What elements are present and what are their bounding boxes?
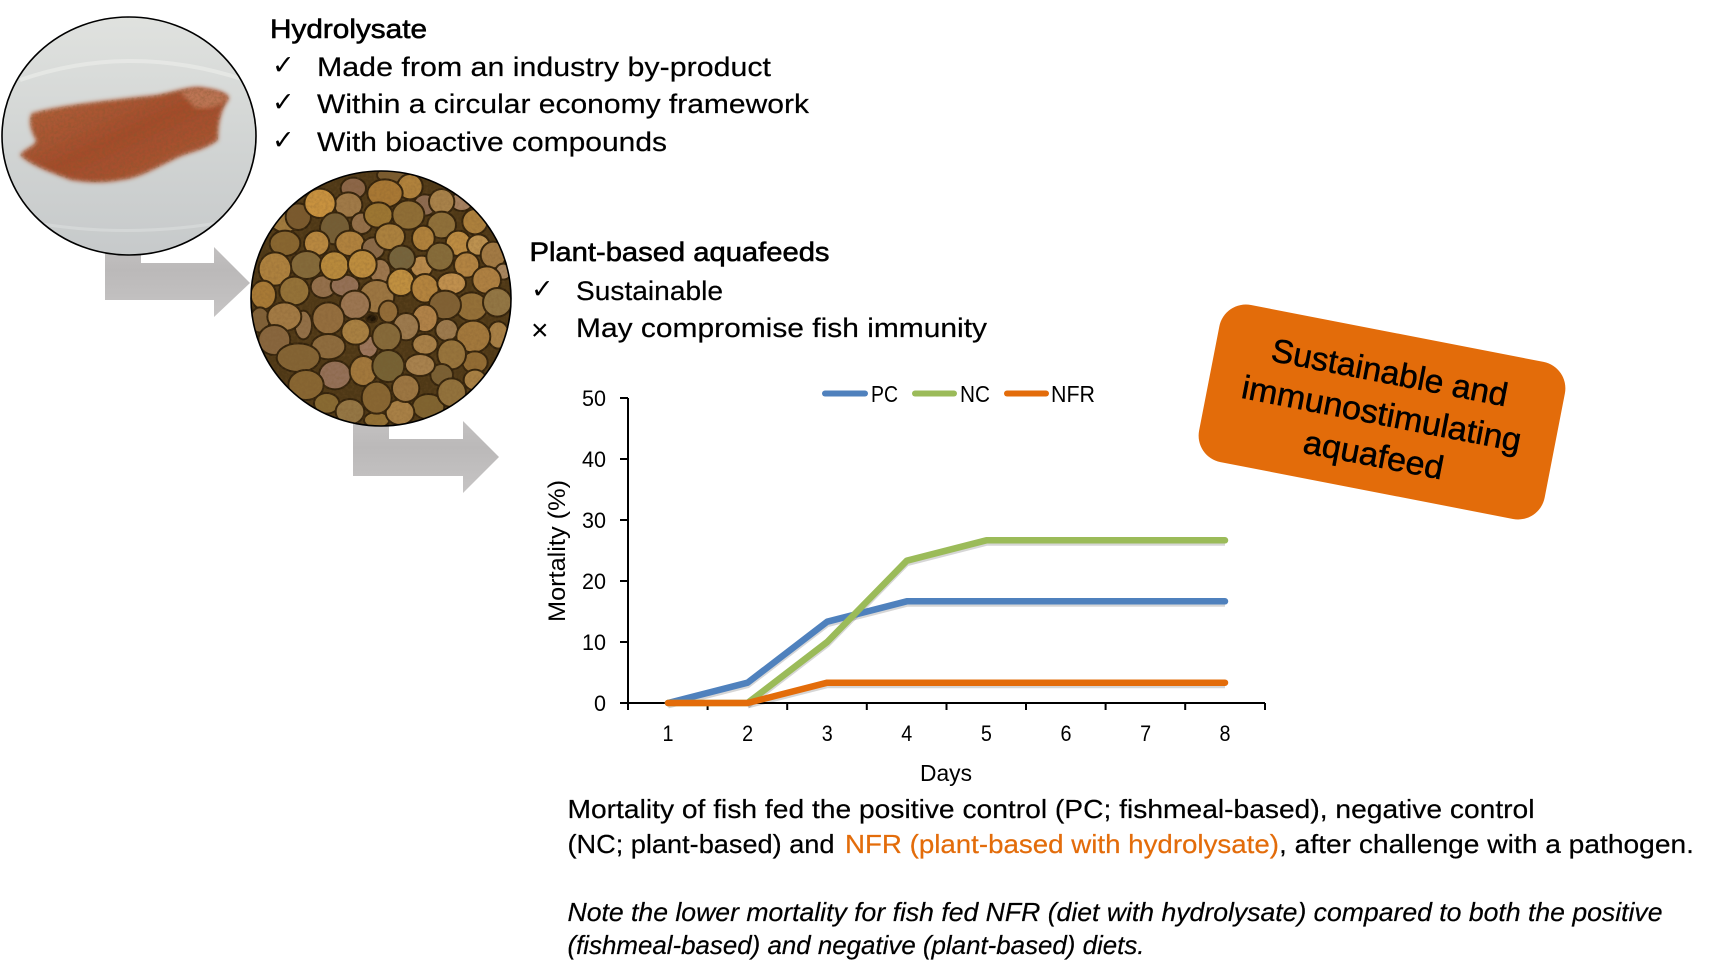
chart legend: NC: [960, 381, 990, 407]
series shadows: [668, 543, 1225, 706]
note: interpretation: [568, 897, 1662, 960]
callout line 3: aquafeed: [1300, 423, 1447, 486]
photo: hydrolysate powder: [0, 15, 260, 260]
heading: plant-based aquafeeds: Plant-based aquafeeds: [530, 237, 830, 267]
x axis tick labels: 5: [981, 721, 992, 746]
x axis tick labels: 1: [662, 721, 674, 746]
y axis tick labels: 0: [594, 691, 606, 716]
heading: hydrolysate: Hydrolysate: [270, 14, 427, 44]
line chart: mortality by day: [544, 381, 1265, 786]
x axis tick labels: 2: [742, 721, 753, 746]
y axis tick labels: 10: [582, 630, 606, 655]
y axis tick labels: 20: [582, 569, 606, 594]
bullet: bioactive compounds: With bioactive compounds: [317, 127, 667, 157]
note: interpretation: Note the lower mortality for fish fed NFR (diet with hydrolysate) compared to both the positive: [568, 897, 1662, 927]
x axis tick labels: 3: [822, 721, 833, 746]
icon: check mark: ✓: [272, 50, 295, 81]
chart legend: NFR: [1051, 381, 1095, 407]
arrow: aquafeed to chart: [353, 380, 499, 493]
caption: chart description: [568, 794, 1694, 859]
caption: chart description: NFR (plant-based with hydrolysate): [845, 829, 1279, 859]
y axis tick labels: 40: [582, 447, 606, 472]
series: PC: [668, 601, 1225, 703]
x axis tick labels: 6: [1060, 721, 1072, 746]
y axis: [620, 398, 628, 703]
arrow: hydrolysate to aquafeed: [105, 200, 250, 317]
x axis tick labels: [662, 721, 1230, 746]
y axis tick labels: [582, 386, 606, 716]
x axis title: Days: [920, 760, 972, 786]
photo: feed pellets: [245, 165, 520, 435]
chart legend: PC: [871, 381, 898, 407]
callout: sustainable and immunostimulating aquafeed: [1194, 300, 1570, 524]
note: interpretation: (fishmeal-based) and negative (plant-based) diets.: [568, 930, 1144, 960]
chart legend: [825, 381, 1095, 407]
bullet: circular economy: Within a circular economy framework: [317, 89, 810, 119]
x axis tick labels: 4: [901, 721, 912, 746]
x axis: [620, 703, 1265, 710]
callout line 1: Sustainable and: [1268, 331, 1511, 413]
bullet: fish immunity: May compromise fish immunity: [576, 313, 988, 343]
text block: hydrolysate benefits: [270, 14, 810, 157]
bullet: by-product: Made from an industry by-product: [317, 52, 772, 82]
y axis tick labels: 50: [582, 386, 606, 411]
x axis tick labels: 8: [1220, 721, 1230, 746]
y axis tick labels: 30: [582, 508, 606, 533]
icon: check mark: ✓: [531, 274, 554, 305]
caption: chart description: , after challenge with a pathogen.: [1279, 829, 1694, 859]
caption: chart description: (NC; plant-based) and: [568, 829, 834, 859]
y axis title: Mortality (%): [544, 480, 571, 622]
icon: cross mark: ×: [531, 314, 549, 347]
caption: chart description: Mortality of fish fed the positive control (PC; fishmeal-based), negative control: [568, 794, 1534, 824]
icon: check mark: ✓: [272, 125, 295, 156]
series: NFR: [668, 683, 1225, 703]
x axis tick labels: 7: [1140, 721, 1151, 746]
callout line 2: immunostimulating: [1239, 368, 1525, 459]
bullet: sustainable: Sustainable: [576, 276, 723, 306]
icon: check mark: ✓: [272, 87, 295, 118]
series: NC: [668, 540, 1225, 703]
text block: plant-based aquafeeds: [530, 237, 988, 347]
